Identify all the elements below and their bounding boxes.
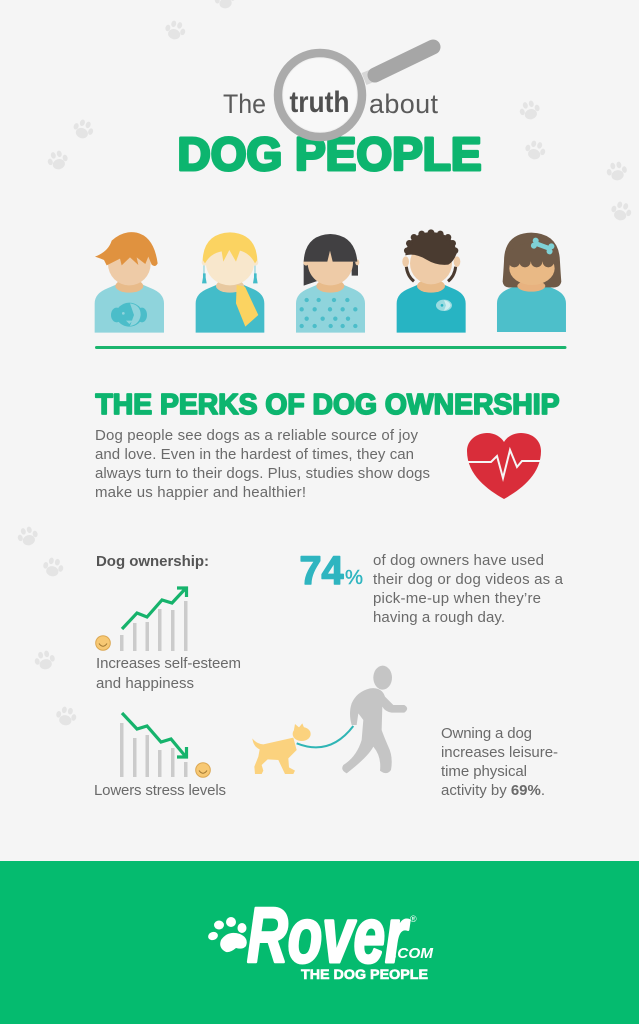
- intro paragraph: always turn to their dogs. Plus, studies show dogs: [95, 465, 430, 482]
- person 2: blonde hair: [196, 232, 264, 333]
- braid: [236, 285, 258, 327]
- title: the truth about: The: [223, 89, 266, 119]
- stat description: pick-me-up when they’re: [373, 590, 541, 607]
- icon: person walking dog: [252, 666, 407, 774]
- bone clip: [530, 237, 555, 255]
- walking stat text: increases leisure-: [441, 744, 558, 761]
- stat description: of dog owners have used: [373, 552, 544, 569]
- dog: [252, 723, 311, 774]
- stat: 74 percent: %: [345, 567, 363, 589]
- caption: self-esteem: [96, 655, 241, 692]
- logo: rover: ®: [410, 914, 417, 924]
- logo: rover: .COM: [393, 945, 434, 962]
- stat description: their dog or dog videos as a: [373, 571, 564, 588]
- stat: 74 percent: 74: [300, 549, 344, 593]
- footer band: [0, 861, 639, 1024]
- caption: self-esteem: and happiness: [96, 675, 194, 692]
- title: the truth about: [223, 47, 438, 137]
- walking stat text: [441, 725, 558, 799]
- caption: self-esteem: Increases self-esteem: [96, 655, 241, 672]
- chart: lowers stress: [120, 713, 210, 777]
- person 1: orange hair: [95, 232, 164, 333]
- intro paragraph: make us happier and healthier!: [95, 484, 306, 501]
- walking stat text: Owning a dog: [441, 725, 532, 742]
- smiley: [196, 763, 210, 777]
- smiley: [96, 636, 110, 650]
- chart: increases self-esteem: [96, 588, 188, 651]
- walking stat text: activity by 69%.: [441, 782, 545, 799]
- logo: rover: [207, 891, 434, 982]
- sweater paws: [300, 298, 357, 328]
- shirt badge: [436, 300, 452, 311]
- person 4: curly hair: [397, 229, 466, 333]
- intro paragraph: Dog people see dogs as a reliable source of joy: [95, 427, 418, 444]
- label: dog ownership: Dog ownership:: [96, 553, 209, 570]
- stat description: [373, 552, 564, 626]
- heading: perks: THE PERKS OF DOG OWNERSHIP: [96, 389, 560, 421]
- shirt dog icon: [111, 303, 147, 327]
- walker: [342, 666, 407, 773]
- background paw prints: [16, 0, 633, 727]
- leash: [297, 726, 353, 747]
- title: the truth about: truth: [290, 86, 350, 119]
- icon: heart with pulse: [467, 433, 541, 499]
- walking stat text: time physical: [441, 763, 527, 780]
- logo: rover: Rover: [247, 891, 410, 979]
- divider: [95, 346, 566, 349]
- intro paragraph: and love. Even in the hardest of times, they can: [95, 446, 414, 463]
- intro paragraph: [95, 427, 430, 501]
- stat description: having a rough day.: [373, 609, 505, 626]
- logo: rover: THE DOG PEOPLE: [301, 966, 428, 982]
- stat: 74 percent: [300, 549, 363, 593]
- logo paw: [207, 917, 247, 952]
- icon: magnifying glass: [278, 47, 433, 137]
- person 3: dark hair and paw sweater: [296, 234, 365, 333]
- caption: stress: Lowers stress levels: [94, 782, 226, 799]
- title: the truth about: about: [369, 89, 438, 119]
- title: dog people: DOG PEOPLE: [178, 128, 482, 180]
- person 5: bone hair clip: [497, 233, 566, 332]
